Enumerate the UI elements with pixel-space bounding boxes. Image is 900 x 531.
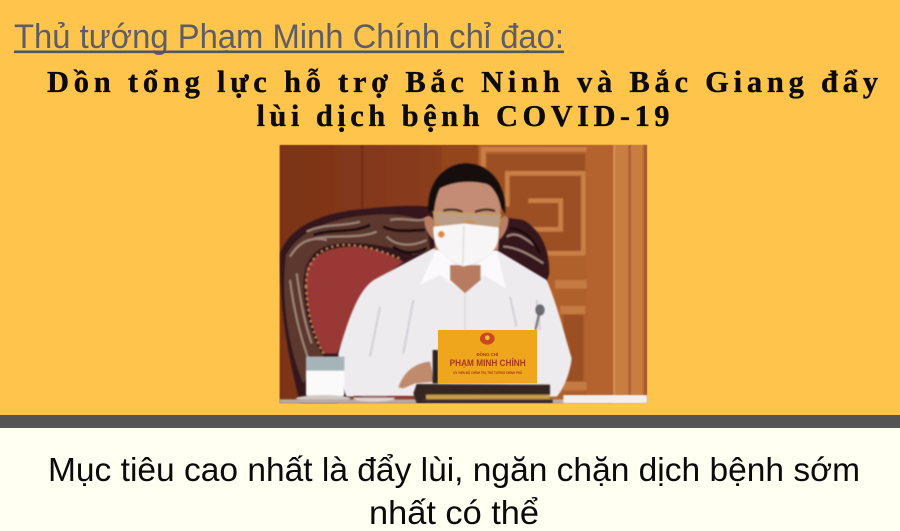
panel: cream footer background bbox=[0, 428, 900, 531]
divider band bbox=[0, 415, 900, 428]
name plate: PHẠM MINH CHÍNH bbox=[450, 357, 526, 368]
text block: main goal: Mục tiêu cao nhất là đẩy lùi, ngăn chặn dịch bệnh sớm bbox=[48, 451, 860, 488]
heading: kicker: Thủ tướng Phạm Minh Chính chỉ đạo: bbox=[14, 18, 564, 56]
chair bbox=[280, 206, 549, 403]
photo: Prime Minister at desk bbox=[279, 145, 647, 403]
face mask bbox=[433, 223, 499, 267]
tea cup bbox=[296, 357, 351, 402]
heading: main title bbox=[47, 65, 878, 133]
panel: yellow header background bbox=[0, 0, 900, 415]
chair carving bbox=[290, 218, 543, 363]
name plate: ĐỒNG CHÍ bbox=[477, 352, 499, 357]
name plate bbox=[438, 330, 537, 383]
wall carved panels bbox=[487, 154, 585, 382]
wooden wall bbox=[279, 145, 647, 403]
text block: main goal bbox=[48, 451, 860, 531]
man: head and hair bbox=[424, 163, 509, 250]
text block: main goal: nhất có thể bbox=[369, 494, 539, 531]
microphone bbox=[535, 304, 545, 330]
heading: main title: Dồn tổng lực hỗ trợ Bắc Ninh và Bắc Giang đẩy bbox=[47, 65, 878, 99]
name plate stand bbox=[413, 350, 553, 403]
hand bbox=[398, 362, 435, 388]
table with papers bbox=[279, 395, 647, 403]
heading: main title: lùi dịch bệnh COVID-19 bbox=[256, 99, 670, 133]
name plate: ỦY VIÊN BỘ CHÍNH TRỊ, THỦ TƯỚNG CHÍNH PHỦ bbox=[453, 370, 522, 375]
man: shirt bbox=[338, 248, 572, 397]
